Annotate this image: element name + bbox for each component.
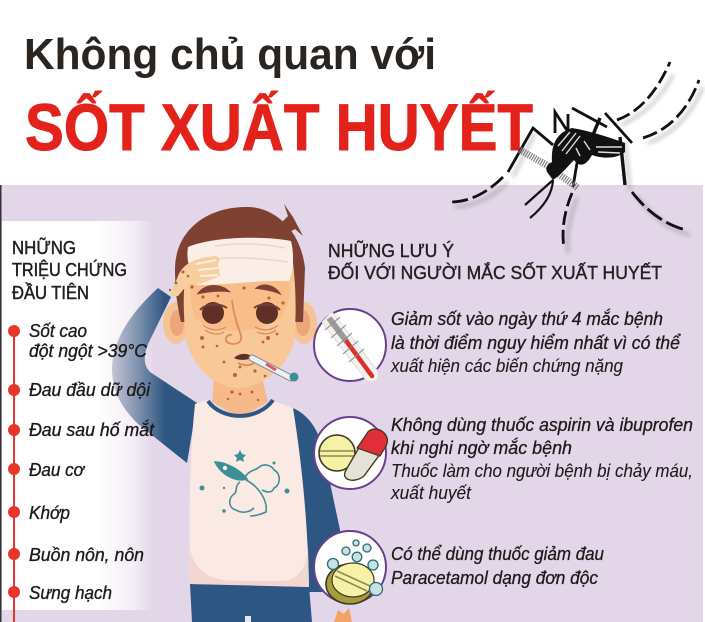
character: sick boy (112, 204, 352, 622)
thermometer in mouth (252, 358, 298, 382)
note 3 text: Paracetamol dạng đơn độc (391, 567, 599, 588)
title: SỐT XUẤT HUYẾT (25, 90, 533, 164)
symptom list: đột ngột >39°C (29, 340, 148, 361)
note 3 text: Có thể dùng thuốc giảm đau (391, 543, 604, 564)
mosquito proboscis (520, 150, 578, 188)
raised arm sleeve (112, 288, 197, 463)
symptom list: Đau đầu dữ dội (29, 379, 151, 400)
symptom list (29, 320, 155, 603)
right sleeve (290, 407, 340, 592)
mosquito legs (450, 62, 699, 248)
notes heading: ĐỐI VỚI NGƯỜI MẮC SỐT XUẤT HUYẾT (328, 262, 662, 283)
mosquito (450, 62, 703, 253)
panel: symptoms (8, 237, 155, 622)
note 1 text: là thời điểm nguy hiểm nhất vì có thể (391, 332, 682, 353)
panel: symptoms background (2, 221, 155, 610)
shirt (190, 400, 309, 587)
symptom list: Khớp (29, 502, 70, 523)
note 1 text: Giảm sốt vào ngày thứ 4 mắc bệnh (391, 308, 663, 329)
hair (175, 207, 305, 322)
symptom timeline (8, 325, 20, 622)
eyes (202, 302, 224, 324)
symptoms heading: NHỮNG (12, 237, 76, 258)
face (184, 262, 296, 388)
note 2 text (390, 414, 693, 503)
title: Không chủ quan với (24, 30, 436, 79)
headband (187, 238, 293, 285)
icon: effervescent tablet (314, 531, 386, 604)
hand on forehead (170, 256, 220, 296)
nose (226, 300, 241, 344)
symptom list: Buồn nôn, nôn (29, 544, 144, 565)
symptom list: Đau sau hố mắt (29, 419, 155, 440)
notes heading: NHỮNG LƯU Ý (328, 240, 454, 261)
shirt collar (208, 400, 273, 416)
title (24, 30, 533, 164)
note 1 text: xuất hiện các biến chứng nặng (390, 355, 624, 376)
icon: thermometer (314, 309, 386, 382)
symptom list: Sốt cao (29, 320, 87, 341)
mouth (234, 354, 253, 360)
pants detail (245, 616, 251, 622)
symptoms heading: ĐẦU TIÊN (12, 282, 89, 303)
neck (212, 378, 268, 418)
ears (163, 302, 189, 344)
note 2 text: xuất huyết (390, 482, 472, 503)
note 2 text: khi nghi ngờ mắc bệnh (391, 437, 572, 458)
symptom list: Sưng hạch (29, 582, 112, 603)
icon: pills (314, 417, 387, 489)
note 2 text: Không dùng thuốc aspirin và ibuprofen (391, 414, 693, 435)
rocket print (200, 450, 290, 516)
eyebrows (199, 286, 279, 293)
symptoms heading: TRIỆU CHỨNG (12, 259, 127, 280)
rash spots (169, 270, 285, 401)
mosquito body (546, 128, 625, 180)
hand at bottom (334, 608, 352, 622)
notes heading (328, 240, 662, 283)
symptom list: Đau cơ (29, 459, 86, 480)
note 1 text (390, 308, 682, 376)
note 3 text (391, 543, 604, 588)
symptoms heading (12, 237, 127, 303)
mosquito shadow (455, 75, 703, 253)
pants (190, 584, 312, 622)
